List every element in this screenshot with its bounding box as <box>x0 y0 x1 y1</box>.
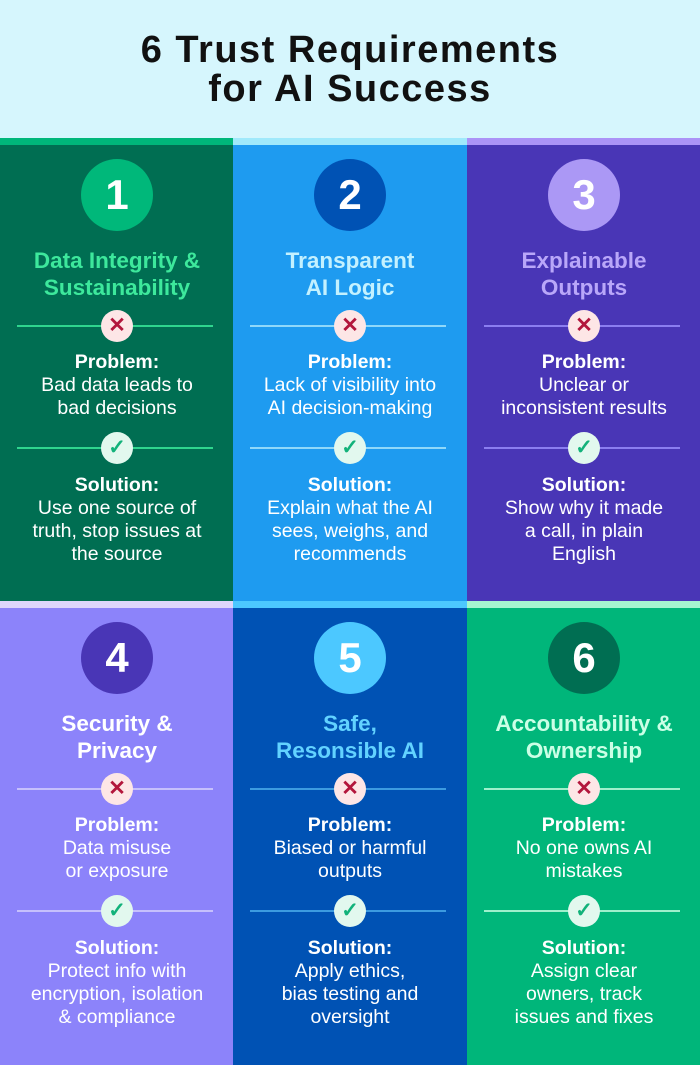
icon: solution check <box>101 895 133 927</box>
number badge 4: 4 <box>105 634 129 681</box>
icon: solution check: ✓ <box>575 436 593 459</box>
number badge 1 <box>81 159 153 231</box>
solution text: English <box>552 543 616 565</box>
number badge 1: 1 <box>105 171 129 218</box>
solution text: a call, in plain <box>525 520 643 542</box>
solution text <box>282 937 418 1028</box>
panel: 1 data integrity <box>0 138 234 602</box>
number badge 5 <box>314 622 386 694</box>
problem text: Bad data leads to <box>41 374 193 396</box>
number badge 3: 3 <box>572 171 596 218</box>
icon: problem x <box>101 773 133 805</box>
icon: problem x: ✕ <box>108 777 126 800</box>
problem text: Data misuse <box>63 837 171 859</box>
solution text: Solution: <box>75 474 159 496</box>
number badge 6 <box>548 622 620 694</box>
number badge 4 <box>81 622 153 694</box>
problem text: Unclear or <box>539 374 629 396</box>
heading 2 <box>286 248 414 300</box>
icon: solution check <box>568 895 600 927</box>
number badge 5: 5 <box>338 634 362 681</box>
solution text: owners, track <box>526 983 642 1005</box>
icon: problem x: ✕ <box>575 777 593 800</box>
icon: solution check: ✓ <box>341 899 359 922</box>
heading 4 <box>61 711 173 763</box>
icon: solution check <box>334 895 366 927</box>
solution text: Use one source of <box>38 497 196 519</box>
panel: 3 explainable <box>467 138 700 602</box>
panel: 4 security <box>0 601 234 1065</box>
icon: problem x <box>568 310 600 342</box>
panel: 6 accountability <box>467 601 700 1065</box>
problem text <box>501 351 667 419</box>
heading 6: Accountability & <box>495 711 673 736</box>
solution text: the source <box>71 543 163 565</box>
problem text <box>274 814 426 882</box>
panel: 2 transparent <box>233 138 467 602</box>
icon: problem x <box>101 310 133 342</box>
heading 4: Security & <box>61 711 173 736</box>
number badge 2 <box>314 159 386 231</box>
heading 3 <box>521 248 647 300</box>
solution text <box>31 937 203 1028</box>
problem text: Problem: <box>308 814 392 836</box>
icon: problem x <box>334 310 366 342</box>
heading 6: Ownership <box>526 738 642 763</box>
solution text: & compliance <box>58 1006 176 1028</box>
heading 3: Explainable <box>521 248 647 273</box>
heading 1: Data Integrity & <box>34 248 200 273</box>
solution text: Explain what the AI <box>267 497 433 519</box>
problem text <box>516 814 652 882</box>
icon: solution check <box>568 432 600 464</box>
icon: solution check <box>334 432 366 464</box>
solution text: Solution: <box>542 474 626 496</box>
problem text: Problem: <box>542 814 626 836</box>
problem text: Lack of visibility into <box>264 374 436 396</box>
icon: problem x <box>568 773 600 805</box>
solution text: recommends <box>294 543 406 565</box>
problem text: No one owns AI <box>516 837 652 859</box>
solution text: encryption, isolation <box>31 983 203 1005</box>
problem text <box>63 814 171 882</box>
solution text: Solution: <box>308 474 392 496</box>
heading 2: Transparent <box>286 248 414 273</box>
icon: solution check <box>101 432 133 464</box>
solution text: Protect info with <box>48 960 186 982</box>
title: 6 Trust Requirements <box>141 29 559 71</box>
number badge 2: 2 <box>338 171 362 218</box>
heading 2: AI Logic <box>306 275 394 300</box>
panel: 5 safe <box>233 601 467 1065</box>
solution text: Solution: <box>308 937 392 959</box>
problem text: inconsistent results <box>501 397 667 419</box>
problem text <box>41 351 193 419</box>
heading 5: Resonsible AI <box>276 738 424 763</box>
icon: problem x: ✕ <box>341 777 359 800</box>
solution text: sees, weighs, and <box>272 520 428 542</box>
problem text: Problem: <box>542 351 626 373</box>
solution text: Solution: <box>542 937 626 959</box>
problem text: Biased or harmful <box>274 837 426 859</box>
problem text: AI decision-making <box>268 397 432 419</box>
solution text <box>267 474 433 565</box>
solution text: Show why it made <box>505 497 663 519</box>
icon: solution check: ✓ <box>575 899 593 922</box>
icon: problem x: ✕ <box>341 314 359 337</box>
solution text: Solution: <box>75 937 159 959</box>
problem text: or exposure <box>66 860 168 882</box>
heading 3: Outputs <box>541 275 627 300</box>
heading 6 <box>495 711 673 763</box>
problem text: outputs <box>318 860 382 882</box>
icon: problem x: ✕ <box>575 314 593 337</box>
number badge 6: 6 <box>572 634 596 681</box>
problem text: mistakes <box>546 860 622 882</box>
problem text: Problem: <box>75 351 159 373</box>
heading 1 <box>34 248 200 300</box>
solution text: issues and fixes <box>515 1006 653 1028</box>
solution text: Apply ethics, <box>295 960 405 982</box>
icon: problem x <box>334 773 366 805</box>
title: for AI Success <box>208 68 492 110</box>
heading 5: Safe, <box>323 711 377 736</box>
number badge 3 <box>548 159 620 231</box>
problem text: bad decisions <box>57 397 177 419</box>
solution text <box>32 474 202 565</box>
solution text: bias testing and <box>282 983 418 1005</box>
heading 1: Sustainability <box>44 275 190 300</box>
icon: solution check: ✓ <box>108 436 126 459</box>
solution text: truth, stop issues at <box>32 520 202 542</box>
solution text: oversight <box>310 1006 390 1028</box>
icon: solution check: ✓ <box>341 436 359 459</box>
problem text: Problem: <box>308 351 392 373</box>
heading 5 <box>276 711 424 763</box>
solution text <box>515 937 653 1028</box>
heading 4: Privacy <box>77 738 157 763</box>
solution text <box>505 474 663 565</box>
title <box>0 0 700 138</box>
icon: solution check: ✓ <box>108 899 126 922</box>
solution text: Assign clear <box>531 960 637 982</box>
problem text <box>264 351 436 419</box>
icon: problem x: ✕ <box>108 314 126 337</box>
problem text: Problem: <box>75 814 159 836</box>
